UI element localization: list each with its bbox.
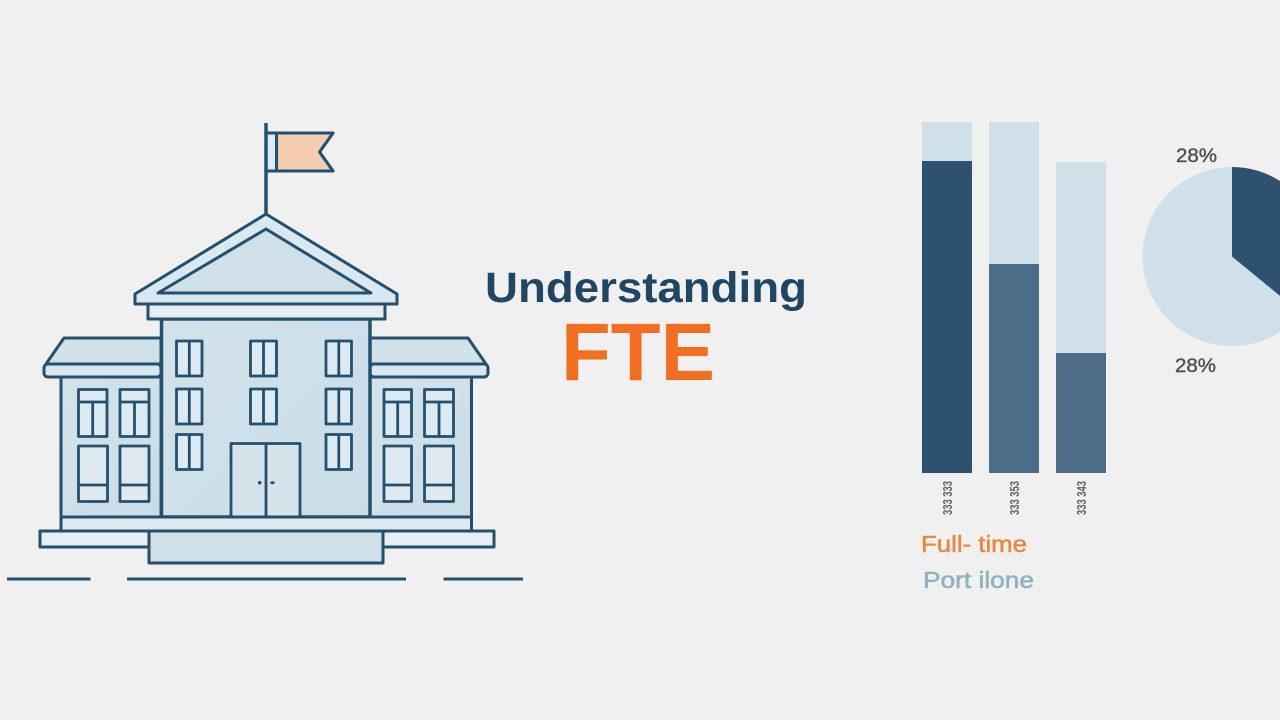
pie label: bottom: 28% xyxy=(1175,356,1216,377)
bar 2 xyxy=(989,122,1039,473)
illustration: university building xyxy=(7,123,523,579)
bar axis labels xyxy=(940,481,1089,515)
ground lines xyxy=(7,578,523,580)
building base and steps xyxy=(40,517,494,563)
bar 1 xyxy=(922,122,972,473)
left wing xyxy=(44,338,161,517)
bar axis labels: 333 333 xyxy=(940,481,955,515)
bar 3 xyxy=(1056,162,1106,473)
legend: full-time: Full- time xyxy=(921,531,1027,557)
pie chart xyxy=(1142,167,1280,346)
pediment roof xyxy=(135,214,397,319)
heading: Understanding: Understanding xyxy=(485,264,807,312)
right wing xyxy=(370,338,488,517)
entrance door xyxy=(231,444,300,517)
left wing windows xyxy=(78,390,149,502)
legend xyxy=(921,531,1034,593)
right wing windows xyxy=(384,390,454,502)
icon: flag and pole xyxy=(266,123,333,214)
pie label: top: 28% xyxy=(1176,146,1217,167)
central block xyxy=(162,319,370,517)
bar axis labels: 333 343 xyxy=(1074,481,1089,515)
central windows xyxy=(176,341,352,470)
bar axis labels: 333 353 xyxy=(1007,481,1022,515)
heading: FTE: FTE xyxy=(561,307,715,398)
title xyxy=(485,264,807,398)
legend: part-time: Port ilone xyxy=(923,567,1034,593)
stacked bar chart xyxy=(922,122,1106,515)
